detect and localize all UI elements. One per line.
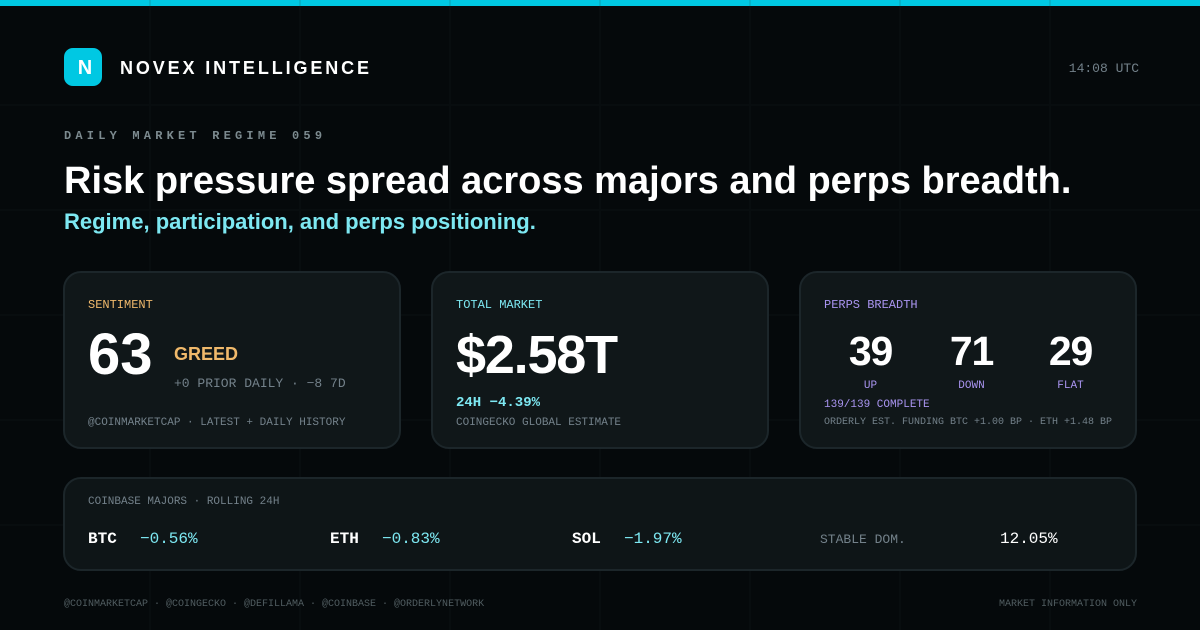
eyebrow: DAILY MARKET REGIME 059 — [64, 129, 326, 143]
perps funding: ORDERLY EST. FUNDING BTC +1.00 BP · ETH +1.48 BP — [824, 417, 1112, 428]
sentiment state: GREED — [174, 344, 238, 364]
brand name: NOVEX INTELLIGENCE — [120, 58, 372, 78]
row: SOL — [572, 530, 682, 548]
panel: total market — [431, 271, 769, 449]
row: SOL: −1.97% — [624, 530, 682, 548]
row: SOL: SOL — [572, 530, 601, 548]
majors label: COINBASE MAJORS · ROLLING 24H — [88, 496, 279, 508]
footer disclaimer: MARKET INFORMATION ONLY — [999, 599, 1137, 610]
stat: flat: 29 — [1049, 328, 1092, 374]
row: stable dominance — [820, 530, 1058, 548]
sentiment change: +0 PRIOR DAILY · −8 7D — [174, 376, 346, 391]
panel: coinbase majors — [63, 477, 1137, 571]
stat: up: 39 — [849, 328, 892, 374]
timestamp: 14:08 UTC — [1069, 61, 1139, 76]
row: stable dominance: STABLE DOM. — [820, 532, 906, 547]
icon: logo badge — [64, 48, 102, 86]
total market value: $2.58T — [456, 325, 617, 385]
row: BTC: −0.56% — [140, 530, 198, 548]
perps completion: 139/139 COMPLETE — [824, 399, 930, 411]
stat: up: UP — [864, 380, 877, 392]
stat: flat: FLAT — [1057, 380, 1084, 392]
row: ETH — [330, 530, 440, 548]
panel: sentiment — [63, 271, 401, 449]
stat: down: 71 — [950, 328, 993, 374]
sentiment label: SENTIMENT — [88, 298, 153, 312]
title: Risk pressure spread across majors and perps breadth. — [64, 160, 1071, 202]
subtitle: Regime, participation, and perps positioning. — [64, 209, 536, 234]
row: ETH: ETH — [330, 530, 359, 548]
total market label: TOTAL MARKET — [456, 298, 542, 312]
icon: logo badge: N — [78, 57, 92, 79]
row: stable dominance: 12.05% — [1000, 530, 1058, 548]
panel: perps breadth — [799, 271, 1137, 449]
sentiment value: 63 — [88, 322, 153, 387]
row: BTC: BTC — [88, 530, 117, 548]
row: BTC — [88, 530, 198, 548]
row: ETH: −0.83% — [382, 530, 440, 548]
footer sources: @COINMARKETCAP · @COINGECKO · @DEFILLAMA · @COINBASE · @ORDERLYNETWORK — [64, 599, 484, 610]
perps label: PERPS BREADTH — [824, 298, 918, 312]
total market change: 24H −4.39% — [456, 395, 540, 411]
stat: down: DOWN — [958, 380, 985, 392]
sentiment source: @COINMARKETCAP · LATEST + DAILY HISTORY — [88, 417, 345, 429]
total market source: COINGECKO GLOBAL ESTIMATE — [456, 417, 621, 429]
